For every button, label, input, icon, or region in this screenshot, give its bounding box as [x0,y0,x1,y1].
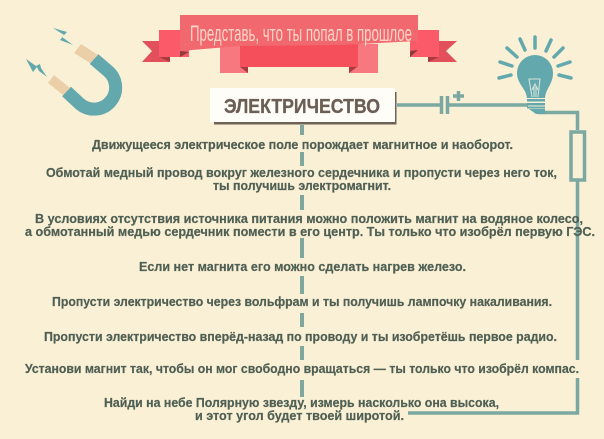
text block: facts: ты получишь электромагнит. [213,178,391,193]
text block: facts [25,137,595,423]
icon: horseshoe magnet [26,28,116,109]
text block: facts: Пропусти электричество вперёд-назад по проводу и ты изобретёшь первое радио. [44,329,557,344]
text block: facts: и этот угол будет твоей широтой. [195,408,404,423]
central dashed line [300,125,304,397]
text block: facts: Найди на небе Полярную звезду, измерь насколько она высока, [104,395,499,410]
text block: facts: Установи магнит так, чтобы он мог свободно вращаться — ты только что изобрёл компас. [25,361,579,376]
icon: light bulb [499,37,571,114]
text block: facts: Если нет магнита его можно сделать нагрев железо. [139,259,466,274]
text block: facts: Пропусти электричество через вольфрам и ты получишь лампочку накаливания. [52,294,552,309]
icon: capacitor [442,91,464,114]
title ribbon [142,15,457,73]
text block: facts: Обмотай медный провод вокруг железного сердечника и пропусти через него ток, [46,165,557,180]
title text: Представь, что ты попал в прошлое [190,21,412,46]
heading box: электричество [210,88,396,124]
electric circuit wire [397,91,584,413]
text block: facts: а обмотанный медью сердечник помести в его центр. Ты только что изобрёл первую ГЭС. [25,224,595,239]
heading box: электричество: ЭЛЕКТРИЧЕСТВО [224,96,380,118]
text block: facts: В условиях отсутствия источника питания можно положить магнит на водяное колесо, [35,211,583,226]
icon: resistor [571,132,584,180]
text block: facts: Движущееся электрическое поле порождает магнитное и наоборот. [92,137,513,152]
